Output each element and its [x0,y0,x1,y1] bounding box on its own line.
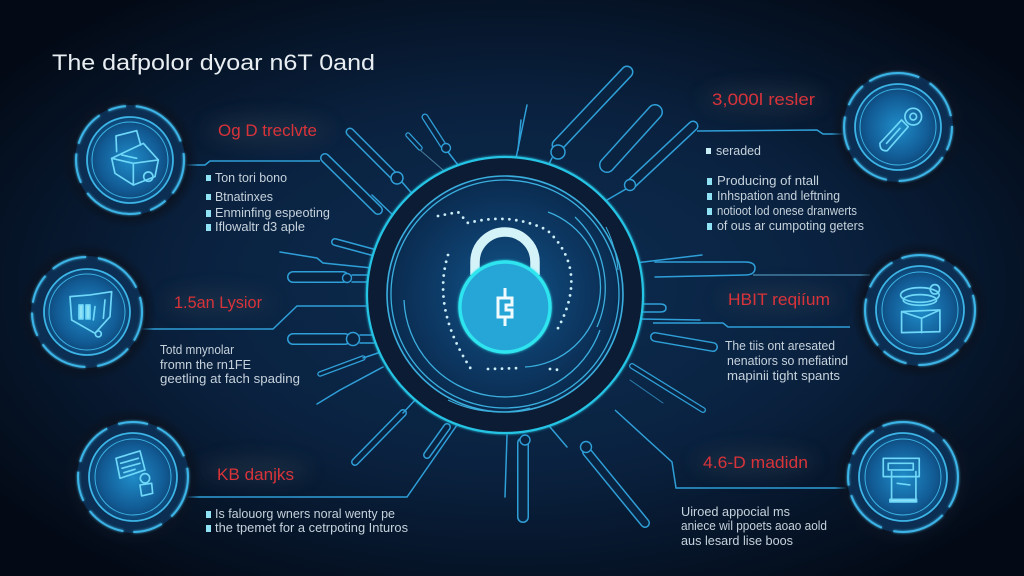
bullet list: top left: Btnatinxes [215,190,273,204]
panel: bottom left item [64,408,408,546]
text block: middle left: geetling at fach spading [160,372,300,386]
rod: right top pill [635,255,755,277]
rod: bottom pill [520,435,530,517]
icon: card slot [834,408,972,546]
rod: upper left second [350,132,415,197]
text block: middle right [725,339,848,383]
bullet list: top right: seraded [716,144,761,158]
icon: open box [62,92,198,228]
bullet list: top left [206,171,330,234]
label: middle left: 1.5an Lysior [174,293,262,312]
connector: top left [182,161,320,165]
panel: bottom right item [681,408,972,548]
connector: middle right upper [753,274,870,276]
bullet list: top right: Producing of ntall [717,174,819,188]
padlock shackle [475,232,535,275]
text block: middle right: nenatiors so mefiatind [727,354,848,368]
panel: middle right item [725,241,989,383]
rod: upper right long [546,72,627,170]
rod: lower left one [355,400,415,462]
connector: bottom left [185,425,457,497]
text block: bottom right: aniece wil ppoets aoao aold [681,519,827,533]
text block: bottom right: aus lesard lise boos [681,534,793,548]
icon: wrench [831,60,965,194]
rod: bottom thin line [505,435,507,497]
text block: middle right: The tiis ont aresated [725,339,835,353]
padlock keyhole glyph [498,288,512,326]
panel: middle left item [18,243,300,386]
icon: box with coil [851,241,989,379]
connector: middle left [138,306,367,329]
padlock body [460,262,550,352]
label: top right: 3,000l resler [712,90,815,109]
rod: left pill one [293,274,368,282]
bullet list: top right: of ous ar cumpoting geters [717,219,864,233]
rod: right small pill [643,304,666,312]
label: bottom right: 4.6-D madidn [703,453,808,472]
rod: upper left thin [408,135,443,170]
text block: middle left [160,343,300,386]
text block: bottom right [681,505,827,548]
rod: upper right free [607,112,655,165]
label glow backgrounds [163,86,839,482]
emblem spiral arcs [391,180,619,412]
rod: lower right [550,427,645,523]
radiating rods [280,72,755,523]
emblem outer ring [367,157,643,433]
rod: lower left two [427,427,447,455]
rod: left trailing line [317,367,383,404]
bullet list: top left: Ton tori bono [215,171,287,185]
text block: middle right: mapinii tight spants [727,369,840,383]
bullet list: bottom left [206,507,408,535]
bullet list: top left: Iflowaltr d3 aple [215,220,305,234]
bullet list: bottom left: the tpemet for a cetrpoting Inturos [215,521,408,535]
rod: upper right connector [607,126,693,200]
emblem dotted arcs [438,212,571,372]
rod: right thin line [640,319,700,320]
label: middle right: HBIT reqiíum [728,290,830,309]
connector: top right [697,130,845,134]
panel: top right item [706,60,965,233]
icon: document and figure [64,408,202,546]
central lock emblem [367,157,643,433]
rod: right lower [630,366,703,410]
bullet list: top right [706,144,864,233]
panel: top left item [62,92,330,234]
connector: bottom right [615,410,848,488]
bullet list: top left: Enminfing espeoting [215,206,330,220]
rod: upper left long [325,158,396,218]
title: The dafpolor dyoar n6T 0and [52,50,375,75]
rod: left lower [320,352,381,374]
rod: left pill two [293,332,374,346]
rod: left upper [335,242,372,252]
label: top left: Og D treclvte [218,121,317,140]
label: bottom left: KB danjks [217,465,294,484]
rod: left wavy line [280,252,372,268]
bullet list: top right: Inhspation and leftning [717,189,840,203]
text block: middle left: fromn the rn1FE [160,358,251,372]
emblem inner disc [387,176,623,412]
text block: bottom right: Uiroed appocial ms [681,505,790,519]
rod: top left short [425,117,458,165]
icon: shield [18,243,156,381]
rod: right middle pill [655,337,713,347]
bullet list: top right: notioot lod onese dranwerts [717,204,857,218]
connector: middle right [653,323,850,327]
bullet list: bottom left: Is falouorg wners noral wenty pe [215,507,395,521]
rod: top needle [515,105,527,163]
text block: middle left: Totd mnynolar [160,343,234,357]
